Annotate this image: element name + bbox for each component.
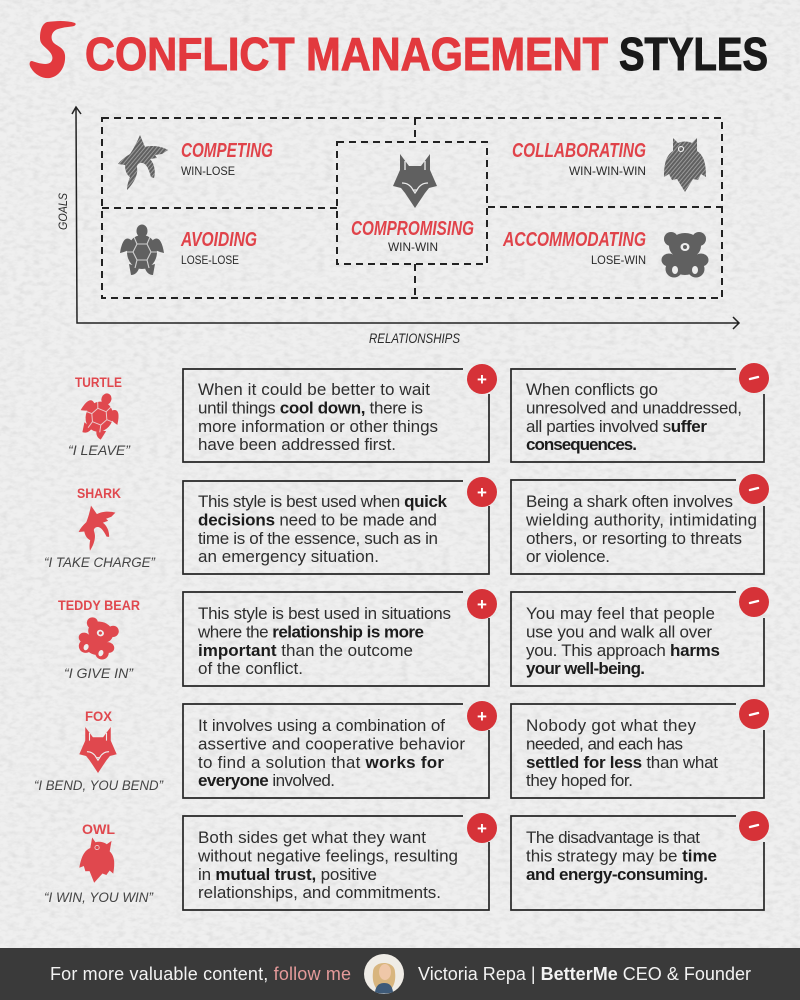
axes [56,107,739,346]
panel: shark cons: Being a shark often involves [526,492,733,511]
heading: styles: STYLES [619,28,768,80]
quadrant: avoiding: AVOIDING [180,229,257,251]
panel: owl pros [183,813,497,910]
panel: fox cons: needed, and each has [526,734,683,754]
quadrant: accommodating: LOSE-WIN [591,253,646,267]
title [30,21,768,80]
panel: shark cons [511,474,769,574]
panel: teddy bear pros [183,589,497,686]
row: owl [44,811,769,910]
footer attribution: Victoria Repa | BetterMe CEO & Founder [418,964,751,984]
panel: fox cons: Nobody got what they [526,716,696,735]
quadrant: compromising: COMPROMISING [351,218,474,240]
panel: shark pros [183,477,497,574]
label: fox: “I BEND, YOU BEND” [34,778,163,793]
quadrant: collaborating [512,138,706,192]
label: fox: FOX [85,709,112,724]
label: shark [44,486,155,570]
panel: teddy bear pros: where the relationship is more [197,622,424,642]
panel: turtle cons: unresolved and unaddressed, [526,398,742,418]
panel: fox pros: assertive and cooperative behavior [198,734,465,754]
panel: turtle cons: consequences. [526,435,637,454]
label: owl [44,822,153,905]
panel: fox pros [183,701,497,798]
panel: fox cons: they hoped for. [526,771,633,790]
label: turtle: “I LEAVE” [68,443,131,458]
panel: teddy bear pros: of the conflict. [198,659,303,678]
panel: shark cons: wielding authority, intimidating [525,510,757,530]
panel: turtle pros: until things cool down, there is [198,398,423,418]
panel: shark cons: or violence. [526,547,610,566]
quadrant: collaborating: COLLABORATING [512,140,646,162]
avatar [364,954,404,994]
panel: turtle pros: more information or other things [198,417,438,436]
label: shark: “I TAKE CHARGE” [44,555,155,570]
quadrant: competing: COMPETING [181,140,273,162]
panel: teddy bear pros: + [477,595,487,614]
axes: GOALS [56,193,70,230]
panel: owl cons: The disadvantage is that [526,828,700,847]
panel: shark pros: time is of the essence, such as in [198,529,438,548]
panel: owl pros: Both sides get what they want [198,828,426,847]
label: shark: SHARK [77,486,121,501]
quadrant: avoiding: LOSE-LOSE [181,253,239,267]
panel: owl cons: and energy-consuming. [526,865,708,884]
label: teddy bear: TEDDY BEAR [58,598,140,613]
row: fox [34,699,769,798]
panel: fox pros: everyone involved. [198,771,335,790]
quadrant: accommodating [502,229,708,278]
footer call to action: For more valuable content, follow me [50,964,351,984]
heading: conflict management: CONFLICT MANAGEMENT [85,28,608,80]
panel: turtle cons: all parties involved suffer [526,417,707,436]
panel: teddy bear cons: You may feel that people [526,604,715,623]
chart: conflict styles matrix [56,107,739,346]
dashed centre box [337,142,487,264]
quadrant: competing [118,135,273,190]
panel: turtle pros: When it could be better to wait [198,380,430,399]
panel: fox pros: + [477,707,487,726]
panel: shark pros: + [477,483,487,502]
panel: shark pros: an emergency situation. [198,547,379,566]
panel: fox pros: It involves using a combination of [198,716,445,735]
quadrant: accommodating: ACCOMMODATING [502,229,646,251]
panel: owl pros: relationships, and commitments. [198,883,441,902]
panel: shark pros: decisions need to be made and [198,510,437,530]
panel: fox pros: to find a solution that works for [198,753,444,772]
footer bar [0,948,800,1000]
panel: turtle pros: have been addressed first. [198,435,396,454]
row: turtle [68,363,769,462]
panel: owl cons: this strategy may be time [526,846,717,866]
panel: owl pros: without negative feelings, resulting [197,846,458,866]
panel: fox cons [511,699,769,798]
panel: turtle cons: When conflicts go [526,380,658,399]
panel: teddy bear cons: your well-being. [526,659,645,678]
panel: owl pros: in mutual trust, positive [198,865,377,884]
panel: fox cons: settled for less than what [526,753,718,772]
panel: teddy bear pros: This style is best used in situations [198,604,451,623]
quadrant: compromising: WIN-WIN [388,240,438,254]
label: turtle [68,375,131,458]
panel: teddy bear pros: important than the outcome [198,641,413,660]
panel: owl cons [511,811,769,910]
axes: RELATIONSHIPS [369,331,460,346]
label: owl: OWL [82,822,115,837]
quadrant: compromising [351,154,474,254]
panel: turtle pros: + [477,370,487,389]
label: turtle: TURTLE [75,375,122,390]
quadrant: collaborating: WIN-WIN-WIN [569,164,646,178]
panel: shark cons: others, or resorting to threats [526,529,742,548]
panel: shark pros: This style is best used when quick [198,492,448,511]
panel: owl pros: + [477,819,487,838]
quadrant: competing: WIN-LOSE [181,164,235,178]
panel: teddy bear cons [511,587,769,686]
label: owl: “I WIN, YOU WIN” [44,890,153,905]
row: teddy bear [58,587,769,686]
quadrant: avoiding [120,224,257,275]
icon: stylized number 5 [30,21,76,78]
panel: teddy bear cons: you. This approach harms [526,641,720,660]
row: shark [44,474,769,574]
panel: teddy bear cons: use you and walk all over [526,622,712,642]
label: teddy bear [58,598,140,681]
panel: turtle cons [511,363,769,462]
panel: turtle pros [183,364,497,462]
label: fox [34,709,163,793]
dashed quadrants [102,118,722,298]
label: teddy bear: “I GIVE IN” [64,666,134,681]
